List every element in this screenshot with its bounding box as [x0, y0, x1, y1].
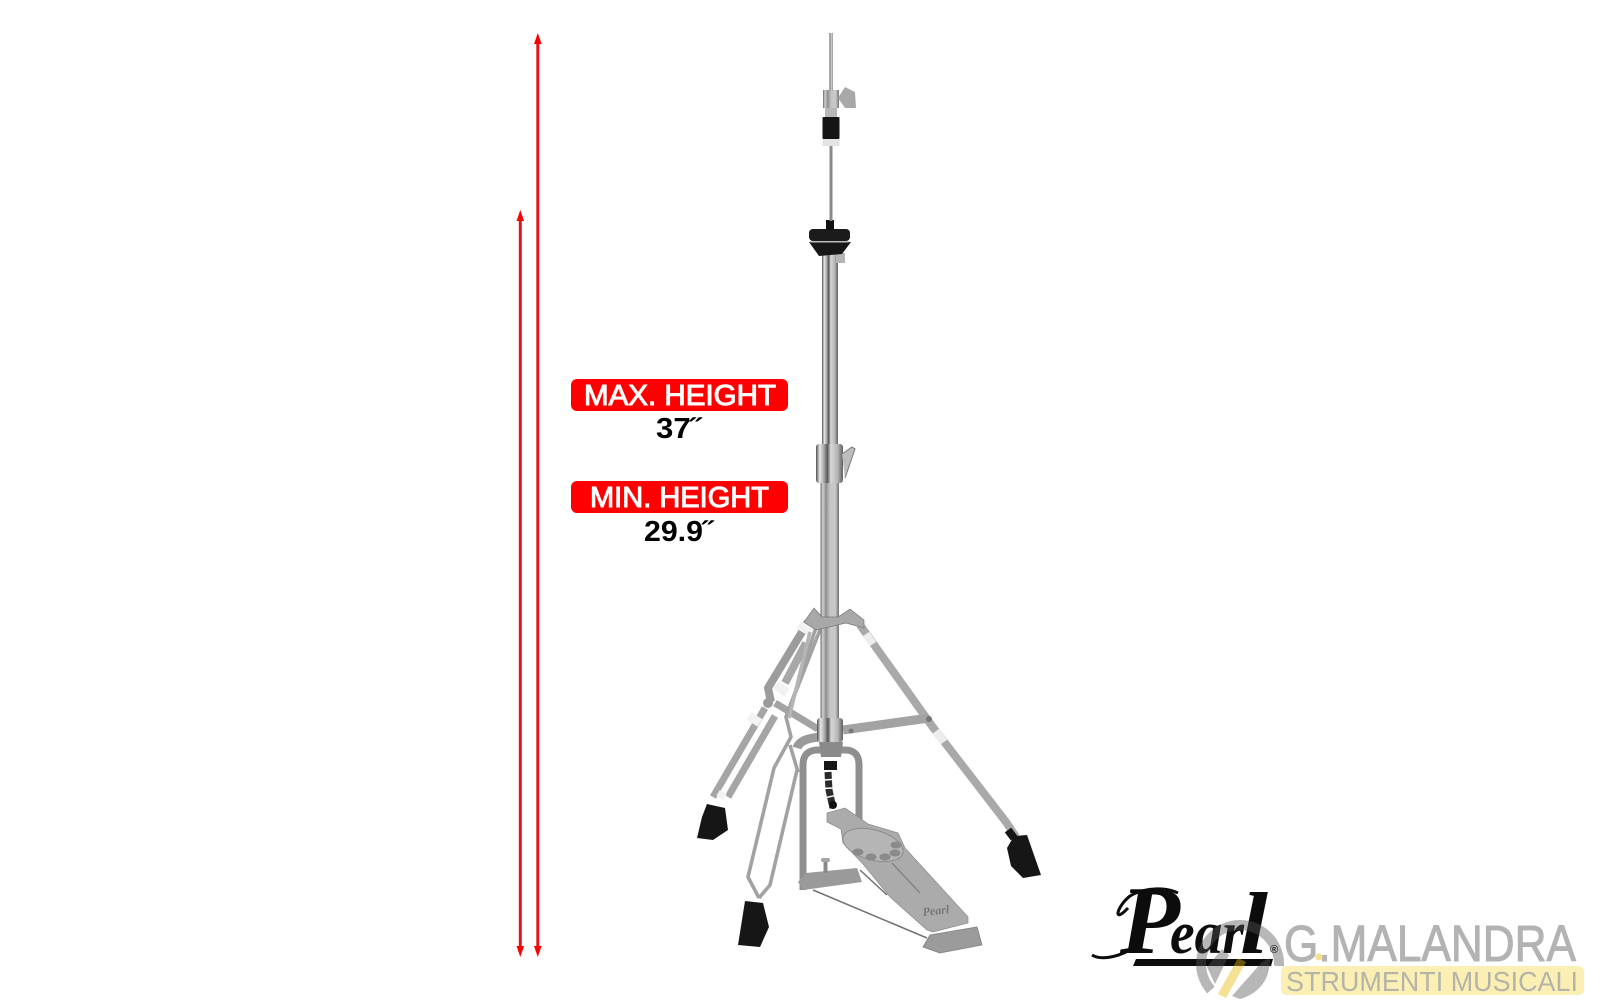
top rod: [829, 33, 833, 91]
main lower tube: [820, 480, 839, 725]
spider casting: [804, 608, 864, 630]
pull rod: [813, 870, 927, 938]
logo: G.Malandra wordmark: [1281, 915, 1584, 997]
chain linkage: [824, 761, 837, 809]
frame base: [798, 868, 862, 890]
logo: Pearl: ear: [1170, 900, 1245, 966]
right foot: [1007, 835, 1041, 878]
label: max height: MAX. HEIGHT: [584, 380, 776, 412]
value: min height 29.9 inches: 29.9˝: [644, 516, 714, 548]
lower hi-hat seat: [809, 220, 851, 263]
label: min height: MIN. HEIGHT: [590, 482, 769, 514]
left rear leg: [713, 622, 822, 797]
logo: G.Malandra watermark emblem: [1201, 925, 1279, 999]
lower collar: [817, 718, 843, 742]
left rear foot: [697, 804, 728, 840]
pedal footboard: Pearl: [922, 902, 950, 919]
right leg: [843, 625, 1016, 838]
heel plate: [923, 927, 982, 953]
adjustment bolt: [821, 858, 830, 873]
hi-hat stand illustration: [697, 33, 1041, 953]
lower block: [819, 742, 843, 757]
logo: Pearl: P: [1119, 867, 1181, 974]
clutch felt and sleeve: [822, 117, 840, 146]
logo: Pearl: [1092, 867, 1278, 974]
front left wire leg: [748, 622, 823, 898]
logo: Pearl: ®: [1270, 944, 1278, 956]
upper tube: [822, 252, 838, 447]
logo: G.Malandra wordmark: STRUMENTI MUSICALI: [1286, 966, 1578, 997]
arrow: minimum height: [516, 210, 524, 957]
value: max height 37 inches: 37˝: [656, 413, 702, 445]
front left foot: [738, 901, 769, 947]
pedal frame: [803, 750, 859, 890]
arrow: maximum height: [534, 33, 542, 957]
clutch body: [823, 90, 839, 117]
height collar and lever: [816, 444, 855, 483]
pull rod lower: [830, 146, 832, 221]
clutch wing screw: [838, 87, 856, 108]
logo: Pearl: l: [1240, 876, 1269, 973]
pedal footboard: [827, 808, 968, 932]
